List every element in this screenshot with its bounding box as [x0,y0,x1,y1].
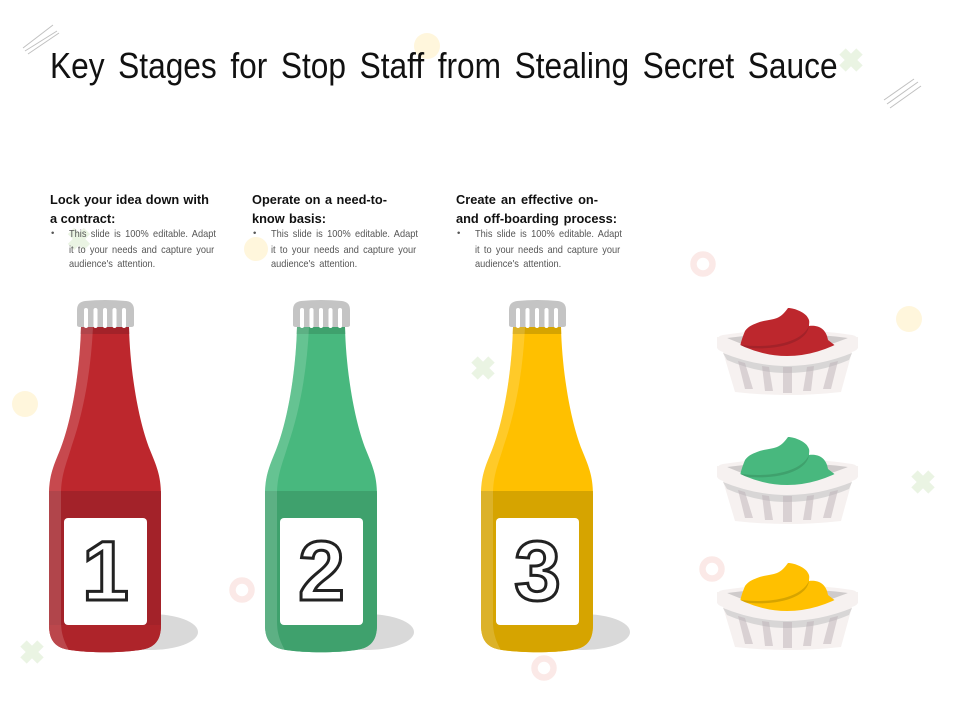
text block: stage 2: it to your needs and capture your [271,244,416,256]
sauce cup: green [717,437,858,524]
text block: stage 3: it to your needs and capture your [475,244,620,256]
title: Key Stages for Stop Staff from Stealing Secret Sauce [50,45,838,86]
bottle 3: yellow [472,300,630,655]
text block: stage 3 [456,192,622,270]
number 3: 3 [514,524,561,618]
sauce cup: red [717,308,858,395]
bottle 1: red [40,300,198,655]
text block: stage 2: Operate on a need-to- [252,192,387,207]
text block: stage 1: • [51,228,54,239]
text block: stage 1: audience's attention. [69,258,155,270]
text block: stage 1: Lock your idea down with [50,192,209,207]
text block: stage 2: know basis: [252,211,326,226]
text block: stage 3: Create an effective on- [456,192,598,207]
text block: stage 2: This slide is 100% editable. Adapt [271,228,418,240]
number 1: 1 [82,524,129,618]
number 2: 2 [298,524,345,618]
bottle 2: green [256,300,414,655]
text block: stage 1: a contract: [50,211,115,226]
text block: stage 1 [50,192,216,270]
text block: stage 1: it to your needs and capture your [69,244,214,256]
text block: stage 2: • [253,228,256,239]
text block: stage 3: and off-boarding process: [456,211,617,226]
sauce cup: yellow [717,563,858,650]
text block: stage 3: audience's attention. [475,258,561,270]
text block: stage 3: This slide is 100% editable. Adapt [475,228,622,240]
text block: stage 2: audience's attention. [271,258,357,270]
text block: stage 3: • [457,228,460,239]
text block: stage 1: This slide is 100% editable. Adapt [69,228,216,240]
text block: stage 2 [252,192,418,270]
